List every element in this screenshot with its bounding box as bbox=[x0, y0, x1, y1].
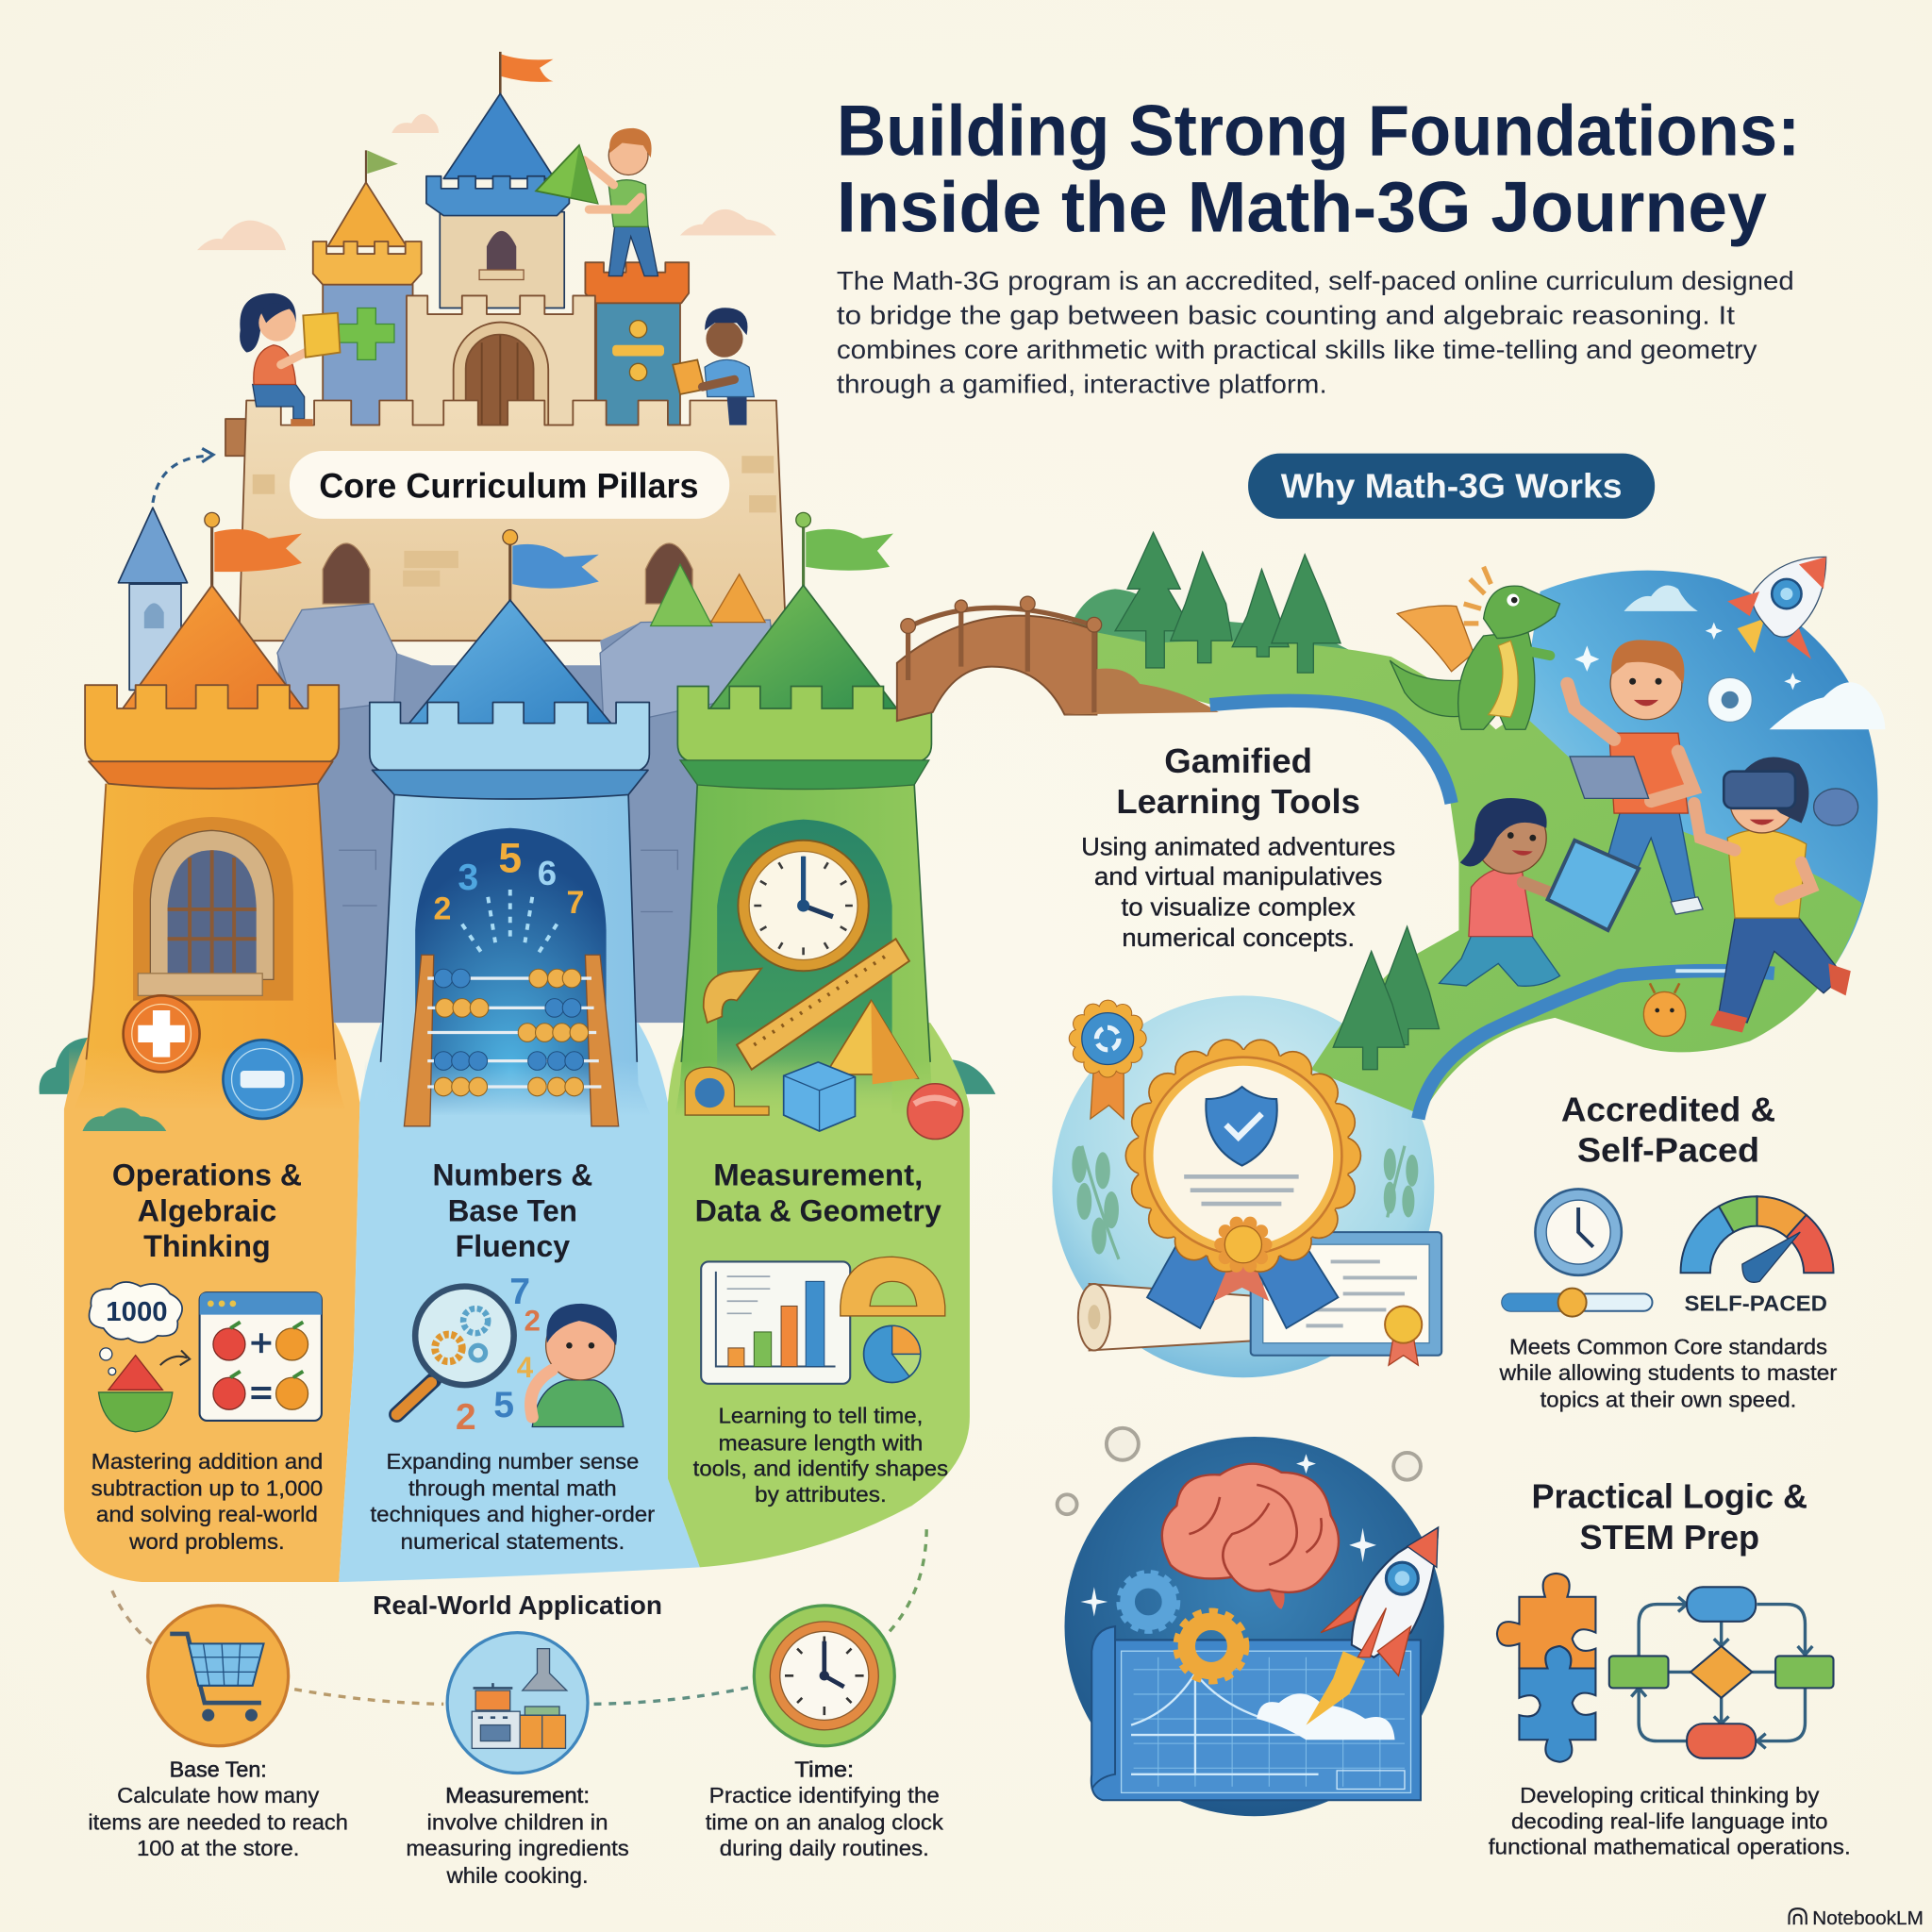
heading: measurement: Measurement, bbox=[713, 1157, 923, 1191]
heading: numbers bbox=[432, 1157, 592, 1263]
clouds and sparkles bbox=[1574, 586, 1885, 729]
icon: minus bbox=[223, 1040, 302, 1119]
text: numbers: numerical statements. bbox=[400, 1529, 625, 1554]
caption: time: time on an analog clock bbox=[706, 1810, 943, 1835]
text: operations: word problems. bbox=[128, 1529, 285, 1554]
heading: practical logic: Practical Logic & bbox=[1532, 1477, 1807, 1516]
icon: clock bbox=[1535, 1189, 1622, 1275]
certificate rosette with scroll and diploma bbox=[1072, 1007, 1441, 1365]
icon: puzzle pieces bbox=[1497, 1574, 1595, 1762]
small badge bbox=[1075, 1007, 1140, 1119]
bushes bbox=[39, 1037, 995, 1094]
diploma bbox=[1251, 1232, 1441, 1365]
icon: progress slider bbox=[1502, 1289, 1653, 1317]
text: practical logic: functional mathematical operations. bbox=[1489, 1835, 1851, 1859]
tower: operations (orange) bbox=[69, 512, 350, 1131]
intro text: through a gamified, interactive platform. bbox=[837, 370, 1327, 399]
text: operations: subtraction up to 1,000 bbox=[92, 1476, 323, 1501]
text: operations bbox=[92, 1449, 323, 1554]
icon: 1000 cloud, bowl and apple equation bbox=[90, 1282, 322, 1432]
title bbox=[837, 92, 1800, 248]
caption: measurement: while cooking. bbox=[445, 1863, 589, 1888]
scroll bbox=[1078, 1284, 1257, 1351]
heading: measurement: Data & Geometry bbox=[695, 1192, 941, 1227]
icon: plus bbox=[124, 995, 200, 1072]
icon: magnifier and thinking child: 5 bbox=[493, 1385, 514, 1425]
child: girl with yellow block bbox=[240, 293, 340, 426]
caption: time: Time: bbox=[794, 1757, 854, 1781]
text: accredited: topics at their own speed. bbox=[1541, 1388, 1796, 1412]
icon: speedometer gauge bbox=[1681, 1196, 1834, 1282]
gears bbox=[1120, 1574, 1245, 1681]
heading: accredited bbox=[1561, 1091, 1775, 1170]
title: Inside the Math-3G Journey bbox=[837, 168, 1767, 248]
central keep tower with blue roof bbox=[426, 93, 569, 308]
heading: numbers: Numbers & bbox=[432, 1157, 592, 1191]
scene sky bbox=[1521, 571, 1878, 1041]
rocket bbox=[1727, 557, 1826, 659]
geometry tools bbox=[685, 939, 963, 1140]
text: practical logic: decoding real-life language into bbox=[1511, 1808, 1828, 1833]
caption: time: during daily routines. bbox=[720, 1836, 929, 1860]
icon: wall clock bbox=[754, 1606, 894, 1746]
text: practical logic: Developing critical thinking by bbox=[1520, 1783, 1820, 1807]
child: boy with VR headset bbox=[1694, 757, 1858, 1033]
caption: measurement: measuring ingredients bbox=[406, 1836, 629, 1860]
text: numbers bbox=[370, 1449, 655, 1554]
icon: magnifier and thinking child: 2 bbox=[525, 1305, 541, 1338]
leaves bbox=[1072, 1146, 1418, 1259]
text: measurement: by attributes. bbox=[755, 1482, 887, 1507]
text: measurement bbox=[693, 1404, 948, 1507]
heading and text: gamified learning tools: Gamified bbox=[1164, 741, 1312, 780]
heading: accredited: Accredited & bbox=[1561, 1091, 1775, 1129]
rocket bbox=[1321, 1528, 1438, 1675]
abacus arch with flying numbers: 6 bbox=[538, 854, 557, 892]
icon: bar chart, protractor and pie bbox=[701, 1257, 945, 1384]
column background: operations bbox=[64, 1023, 359, 1582]
window with stone arch bbox=[133, 817, 293, 1001]
abacus arch with flying numbers bbox=[365, 828, 653, 1116]
text: measurement: measure length with bbox=[718, 1430, 923, 1455]
left tower with plus sign bbox=[313, 150, 422, 425]
icon: 1000 cloud, bowl and apple equation: 1000 bbox=[106, 1297, 168, 1327]
abacus arch with flying numbers: 3 bbox=[458, 858, 478, 898]
text: operations: and solving real-world bbox=[96, 1502, 318, 1526]
caption: base ten: Base Ten: bbox=[170, 1757, 267, 1781]
curriculum pillars label bbox=[290, 451, 729, 519]
launch cloud bbox=[1257, 1693, 1395, 1740]
caption: base ten: items are needed to reach bbox=[88, 1810, 348, 1835]
intro text bbox=[837, 266, 1794, 399]
notebooklm mark: NotebookLM bbox=[1812, 1908, 1924, 1929]
tower: numbers (blue) bbox=[365, 530, 653, 1126]
heading: operations: Thinking bbox=[143, 1228, 271, 1263]
castle upper towers bbox=[313, 52, 689, 425]
caption: measurement: involve children in bbox=[427, 1810, 608, 1835]
icon: magnifier and thinking child bbox=[397, 1272, 624, 1438]
heading and text: gamified learning tools: Using animated adventures bbox=[1081, 832, 1395, 860]
heading: numbers: Base Ten bbox=[448, 1192, 577, 1227]
why math-3g works pill bbox=[1248, 454, 1655, 519]
intro text: to bridge the gap between basic counting and algebraic reasoning. It bbox=[837, 301, 1735, 330]
heading: real-world application: Real-World Application bbox=[373, 1591, 662, 1620]
caption: measurement: Measurement: bbox=[445, 1783, 590, 1807]
icon: kitchen bbox=[447, 1633, 588, 1774]
abacus arch with flying numbers: 7 bbox=[567, 885, 584, 921]
text: accredited: while allowing students to master bbox=[1498, 1360, 1838, 1385]
caption: measurement bbox=[406, 1783, 629, 1888]
text: measurement: tools, and identify shapes bbox=[693, 1457, 948, 1481]
heading: operations: Operations & bbox=[112, 1157, 302, 1191]
sparkles bbox=[1080, 1454, 1376, 1617]
dashed connectors bbox=[112, 1526, 926, 1704]
icon: magnifier and thinking child: 4 bbox=[517, 1351, 534, 1384]
shield icon bbox=[1206, 1087, 1277, 1166]
dashed arrow to castle bbox=[153, 448, 213, 503]
heading: operations: Algebraic bbox=[138, 1192, 276, 1227]
landscape ground and river bbox=[897, 589, 1862, 1119]
blueprint bbox=[1091, 1626, 1421, 1800]
certificate scene backdrop bbox=[1052, 995, 1434, 1377]
heading and text: gamified learning tools: to visualize complex bbox=[1122, 892, 1356, 921]
heading: practical logic bbox=[1532, 1477, 1807, 1557]
heading: measurement bbox=[695, 1157, 941, 1227]
heading and text: gamified learning tools: and virtual manipulatives bbox=[1094, 862, 1382, 891]
title: Building Strong Foundations: bbox=[837, 92, 1800, 172]
heading: accredited: Self-Paced bbox=[1577, 1131, 1759, 1170]
clock bbox=[738, 841, 869, 971]
intro text: combines core arithmetic with practical skills like time-telling and geometry bbox=[837, 335, 1757, 364]
label: self-paced: SELF-PACED bbox=[1684, 1291, 1827, 1316]
caption: base ten bbox=[88, 1757, 348, 1860]
text: numbers: Expanding number sense bbox=[386, 1449, 639, 1474]
stem illustration: brain, gears, rocket, blueprint bbox=[1058, 1428, 1444, 1816]
panel: curriculum colour columns bbox=[64, 1023, 970, 1582]
castle main wall bbox=[225, 400, 786, 641]
text: practical logic bbox=[1489, 1783, 1851, 1859]
column background: measurement bbox=[668, 1023, 970, 1567]
heading and text: gamified learning tools bbox=[1081, 741, 1395, 952]
caption: time: Practice identifying the bbox=[709, 1783, 940, 1807]
central gatehouse with door bbox=[407, 295, 595, 425]
child: boy with laptop bbox=[1567, 640, 1703, 914]
right tower with division sign bbox=[585, 262, 689, 425]
text: numbers: techniques and higher-order bbox=[370, 1502, 655, 1526]
blue ribbons bbox=[1147, 1236, 1338, 1328]
abacus bbox=[404, 955, 619, 1126]
icon: magnifier and thinking child: 7 bbox=[509, 1272, 530, 1312]
pine trees bbox=[1115, 532, 1440, 1070]
icon: shopping cart bbox=[148, 1606, 289, 1746]
rocks and blue-grey back wall bbox=[277, 604, 789, 1023]
heading: operations bbox=[112, 1157, 302, 1263]
flag: top orange bbox=[500, 52, 553, 96]
text: numbers: through mental math bbox=[408, 1476, 617, 1501]
bridge bbox=[897, 596, 1102, 721]
child: boy with orange book bbox=[673, 308, 754, 425]
child: kneeling girl with tablet bbox=[1440, 798, 1639, 986]
heading: numbers: Fluency bbox=[456, 1228, 570, 1263]
heading and text: gamified learning tools: numerical concepts. bbox=[1122, 924, 1355, 952]
heading: practical logic: STEM Prep bbox=[1579, 1518, 1759, 1557]
text: accredited: Meets Common Core standards bbox=[1509, 1334, 1827, 1358]
caption: base ten: Calculate how many bbox=[117, 1783, 320, 1807]
abacus arch with flying numbers: 2 bbox=[433, 891, 451, 926]
dirt bank bbox=[1062, 669, 1219, 715]
intro text: The Math-3G program is an accredited, self-paced online curriculum designed bbox=[837, 266, 1794, 295]
flowchart bbox=[1609, 1587, 1834, 1758]
small bush bbox=[83, 1108, 166, 1131]
heading and text: gamified learning tools: Learning Tools bbox=[1116, 782, 1360, 821]
text: measurement: Learning to tell time, bbox=[718, 1404, 923, 1428]
small blue turret bbox=[118, 508, 188, 690]
clouds behind castle bbox=[197, 114, 776, 250]
caption: base ten: 100 at the store. bbox=[137, 1836, 299, 1860]
bubbles bbox=[1058, 1428, 1421, 1514]
small pyramids on rocks bbox=[651, 564, 765, 626]
why math-3g works pill: Why Math-3G Works bbox=[1281, 467, 1623, 506]
brain bbox=[1162, 1464, 1339, 1609]
icon: magnifier and thinking child: 2 bbox=[456, 1397, 476, 1438]
rosette bbox=[1144, 1058, 1341, 1255]
text: accredited bbox=[1498, 1334, 1838, 1412]
tower: measurement (green) bbox=[672, 512, 963, 1140]
child: boy lifting green pyramid bbox=[536, 128, 658, 276]
column background: numbers bbox=[339, 1023, 700, 1582]
text: operations: Mastering addition and bbox=[92, 1449, 323, 1474]
abacus arch with flying numbers: 5 bbox=[498, 836, 522, 882]
curriculum pillars label: Core Curriculum Pillars bbox=[319, 466, 699, 506]
caption: time bbox=[706, 1757, 943, 1860]
river bbox=[1210, 701, 1452, 804]
dragon bbox=[1390, 567, 1560, 729]
small orange creature bbox=[1643, 983, 1686, 1036]
